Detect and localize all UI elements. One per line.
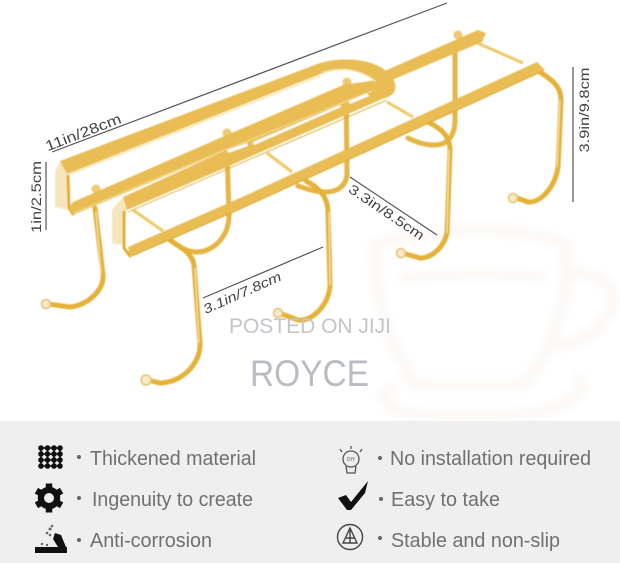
icon: stable triangle: [338, 524, 362, 550]
dimension: total height: [573, 67, 592, 202]
dimension: rack depth: 3.3in/8.5cm: [346, 181, 427, 243]
feature: ingenuity: Ingenuity to create: [92, 489, 253, 511]
feature: stable: Stable and non-slip: [391, 530, 560, 552]
watermark: name: ROYCE: [250, 353, 369, 394]
rail slits and highlight seams: [68, 69, 543, 256]
panel: features: [0, 421, 620, 563]
dimension: hook spacing: [201, 247, 323, 317]
rail A: [60, 63, 323, 174]
front frame faces: [55, 161, 127, 245]
frame uprights: [68, 176, 130, 256]
dimension: total height: 3.9in/9.8cm: [576, 68, 592, 152]
middle rail right: [380, 30, 486, 85]
dimension: rack depth: [346, 177, 437, 243]
hook highlights: [96, 100, 560, 343]
back hooks: [170, 45, 455, 252]
watermark: posted on: POSTED ON JIJI: [229, 315, 391, 338]
feature: easy to take: Easy to take: [391, 489, 500, 511]
dimension: hook spacing: 3.1in/7.8cm: [201, 269, 284, 317]
icon: gear: [36, 484, 62, 512]
icon: anti-corrosion: [35, 525, 67, 553]
hook end balls: [42, 194, 518, 385]
lower front rail: [128, 62, 545, 257]
front hooks: [48, 72, 561, 383]
cross bars: [133, 42, 523, 231]
feature: no installation: No installation required: [390, 448, 591, 470]
icon: thickened grid: [38, 445, 63, 469]
U head: [320, 60, 395, 98]
faint coffee cup background: [375, 230, 612, 417]
dimension: rail height: 1in/2.5cm: [29, 161, 44, 233]
feature: anti-corrosion: Anti-corrosion: [90, 530, 212, 552]
feature: thickened material: Thickened material: [90, 448, 256, 470]
dimension: length: 11in/28cm: [43, 111, 124, 155]
product: gold mug rack: [42, 30, 561, 385]
dimension: length: [43, 3, 447, 155]
icon: DIY bulb: [340, 446, 362, 473]
U lower leg: [123, 88, 387, 210]
bullets: [77, 455, 383, 542]
icon: check mark: [338, 481, 368, 510]
top knobs: [92, 30, 462, 194]
middle rail left: [69, 80, 385, 215]
icon: DIY bulb: DIY: [347, 457, 356, 463]
